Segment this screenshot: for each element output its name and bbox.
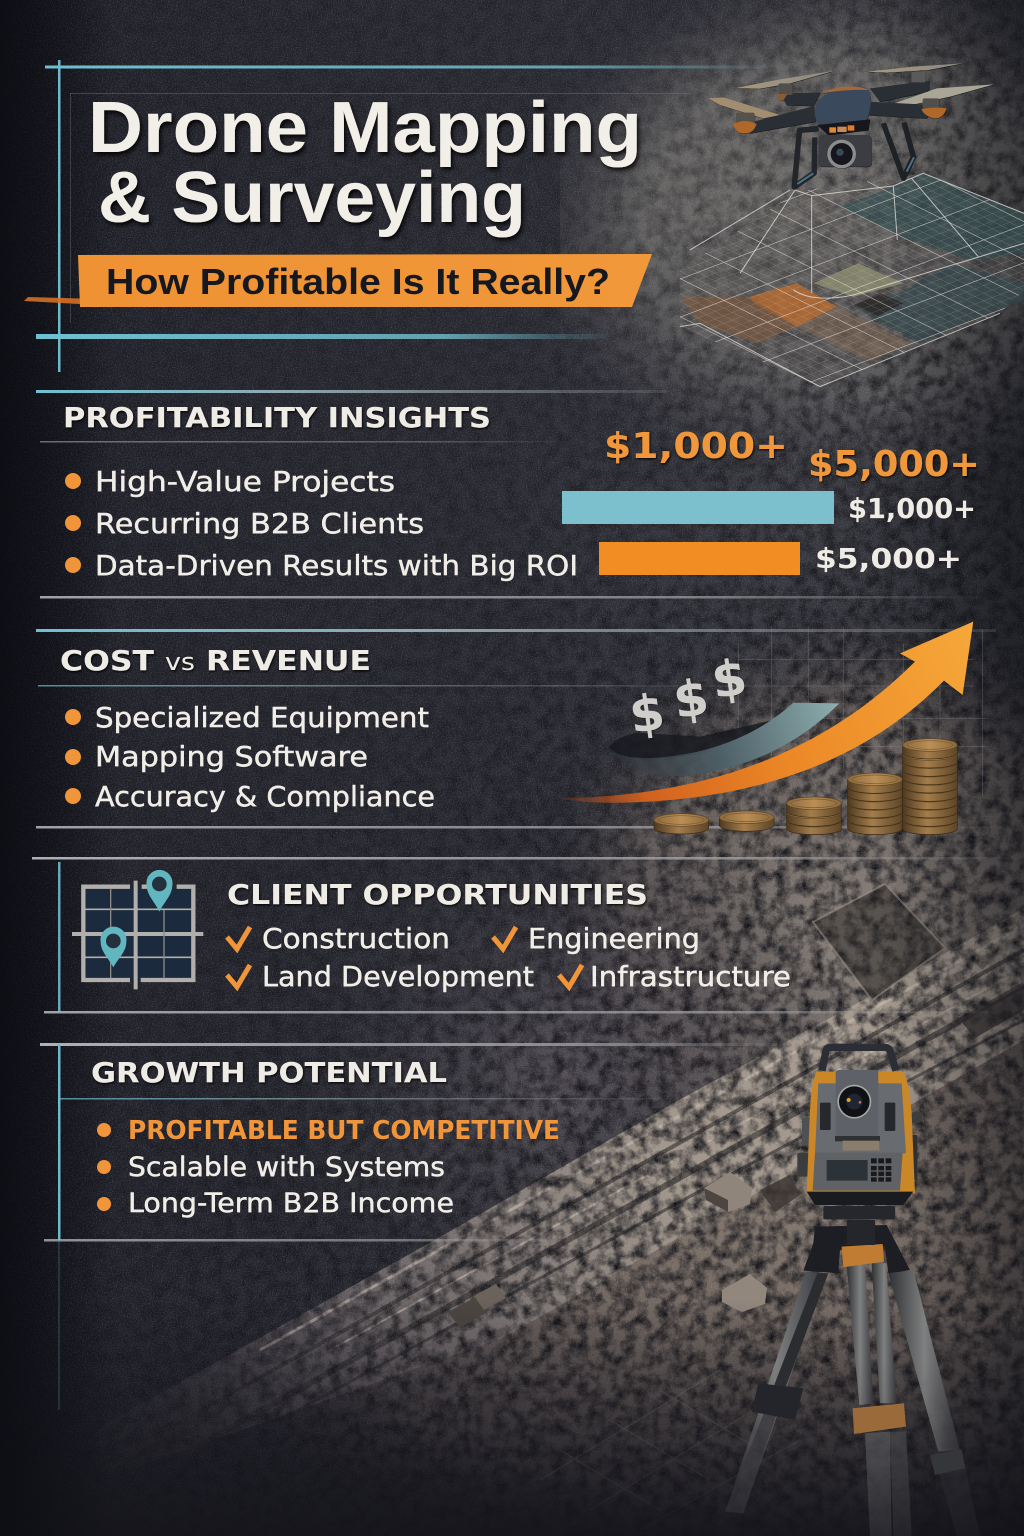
drone camera [818,135,872,168]
bullet list: profitability: Data-Driven Results with Big ROI [95,549,578,582]
checklist: client sectors: Land Development [262,960,534,993]
bullet list: growth: Scalable with Systems [128,1152,445,1183]
tripod head [803,1206,910,1273]
heading: growth potential: GROWTH POTENTIAL [91,1056,447,1089]
illustration: total station on tripod [713,1047,980,1536]
bullet list: growth: Long-Term B2B Income [128,1188,454,1219]
checklist: client sectors: Infrastructure [590,960,791,993]
heading: cost vs revenue: COST vs REVENUE [60,644,371,677]
gray swoosh [609,703,839,776]
bullet list: profitability: High-Value Projects [95,465,395,498]
panel: client opportunities [32,857,1024,1014]
heading: client opportunities: CLIENT OPPORTUNITIES [227,878,648,911]
bullet list: cost: Specialized Equipment [95,701,429,734]
drone map overlay grid [680,173,1024,387]
dollar signs: $ [708,648,751,710]
bar chart: price comparison [562,426,980,575]
instrument handle [822,1047,896,1071]
bullet list: cost [65,701,435,813]
title [88,88,642,238]
tripod legs [713,1263,980,1536]
bar chart: price comparison: $5,000+ [808,444,980,485]
road tracks [130,925,1024,1450]
instrument body [797,1070,922,1193]
bullet list: profitability: Recurring B2B Clients [95,507,424,540]
bar chart: price comparison: $1,000+ [848,492,976,525]
bullet list: growth [97,1116,560,1219]
icon: map grid with location pins [72,870,203,989]
bullet list: cost: Mapping Software [95,740,368,773]
map pin two [100,927,126,967]
map pin one [146,870,172,912]
checklist: client sectors: Engineering [528,922,700,955]
chart: revenue growth arrow with coins [540,622,987,835]
bar chart: price comparison: $5,000+ [815,542,962,575]
instrument control panel [807,1153,913,1205]
subtitle banner [24,254,652,307]
drone motors [733,72,947,133]
tripod straps [752,1383,965,1475]
heading: profitability insights: PROFITABILITY INSIGHTS [63,401,491,434]
bullet list: growth: PROFITABLE BUT COMPETITIVE [128,1116,560,1146]
subtitle banner: How Profitable Is It Really? [106,261,610,302]
bar chart: price comparison: $1,000+ [604,426,788,467]
bullet list: cost: Accuracy & Compliance [95,780,435,813]
checklist: client sectors [227,922,791,993]
bullet list: profitability [65,465,578,582]
dollar signs: $ [626,683,668,745]
drone landing legs [794,123,914,187]
frame lines around the title [36,60,790,372]
panel: growth potential [40,1043,800,1410]
dollar signs: $ [670,668,712,730]
drone arms [745,81,933,133]
panel: profitability insights [36,390,985,598]
drone illustration [708,63,994,187]
orange arrow [560,622,973,803]
drone rotor blades [708,63,994,118]
ground plots [448,884,1024,1328]
drone body [815,86,871,125]
instrument lens [837,1085,871,1119]
coin stacks [654,739,957,835]
dollar signs [626,648,751,745]
panel: cost vs revenue [36,629,1006,828]
title: Drone Mapping [88,88,642,168]
checklist: client sectors: Construction [262,922,450,955]
title: & Surveying [98,158,526,238]
